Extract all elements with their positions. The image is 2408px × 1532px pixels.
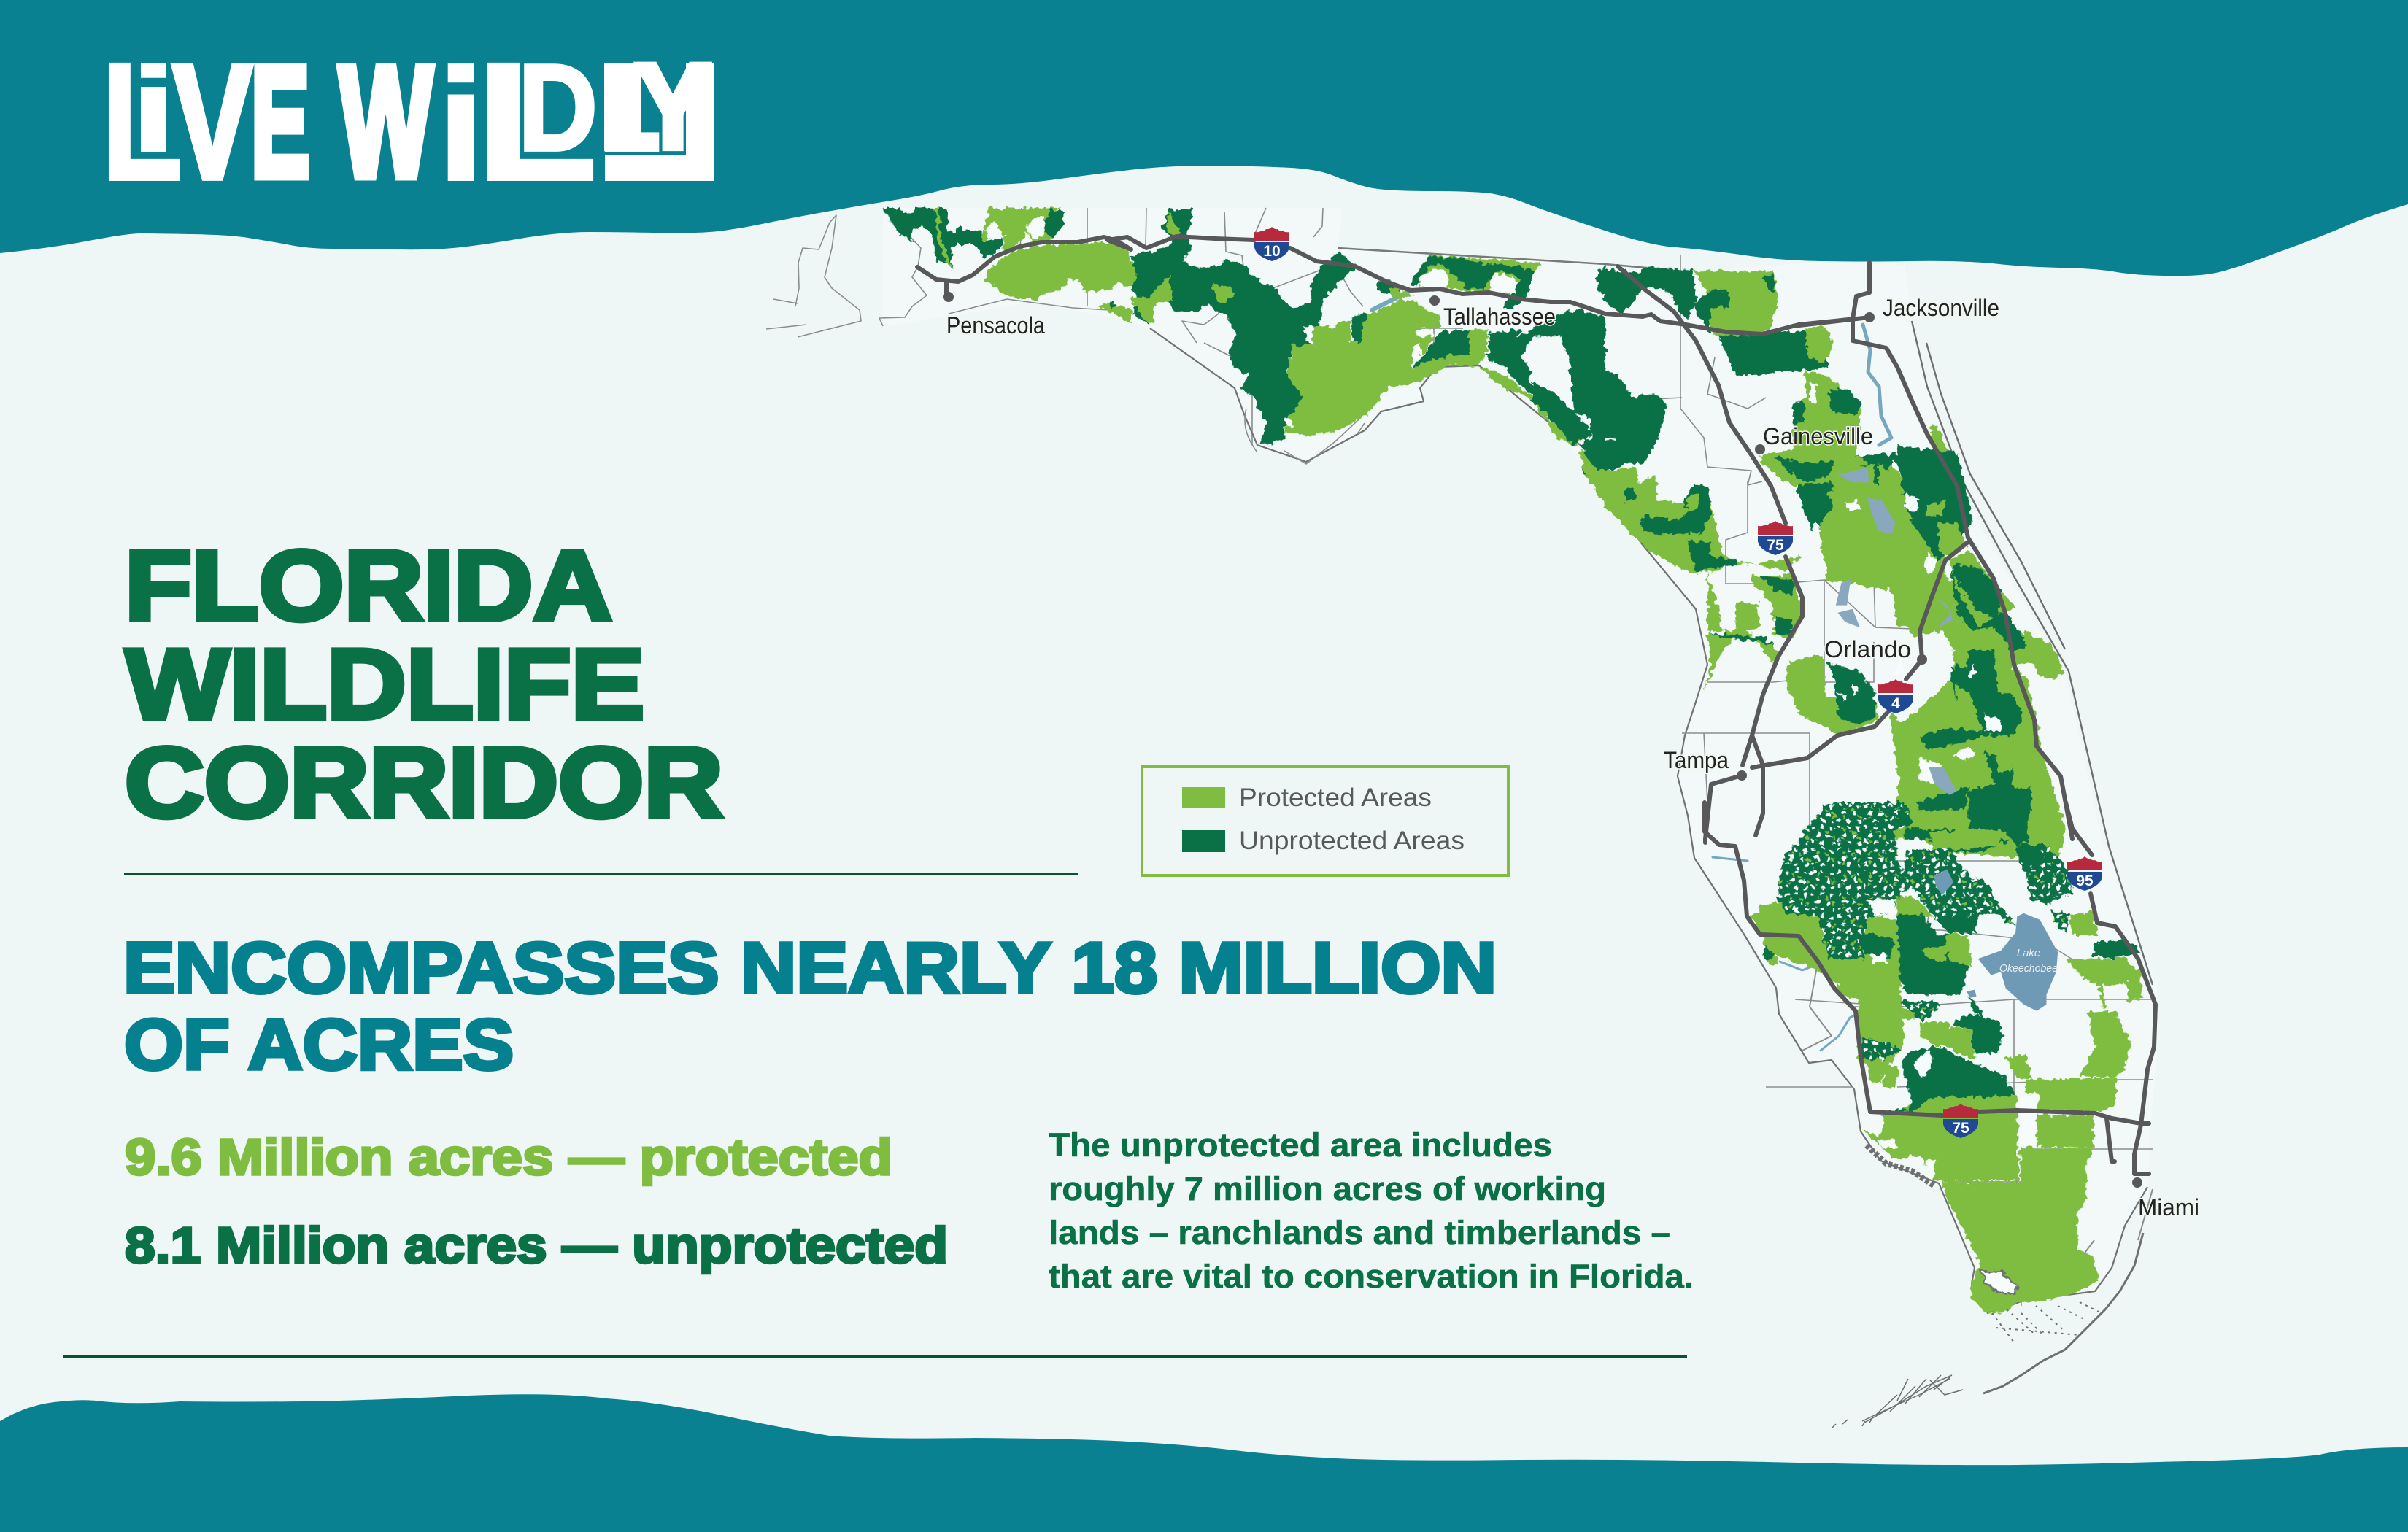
land gaps: [985, 214, 1046, 241]
city labels: Miami: [2138, 1194, 2199, 1220]
highway: I-95 south: [2066, 802, 2156, 1174]
logo: Live Wildly: [101, 28, 714, 215]
map of Florida: [766, 208, 2199, 1428]
logo: Live Wildly: i: [438, 37, 485, 213]
lake: small south: [1967, 990, 1976, 998]
shield: I-4: 4: [1891, 695, 1900, 712]
highway: I-4: [1752, 542, 1968, 767]
logo: Live Wildly: L: [601, 43, 659, 174]
shield: I-10: 10: [1263, 243, 1281, 260]
stat: protected acres: 9.6 Million acres — protected: [125, 1129, 892, 1185]
protected base coverage: [1582, 460, 2066, 1075]
protected: western panhandle: [981, 208, 1131, 322]
lakes: north and central: [1836, 468, 1957, 795]
unprotected: central panhandle: [1130, 209, 1605, 476]
protected base: central panhandle: [1095, 241, 1605, 492]
protected overlays: south Florida: [1919, 933, 1972, 965]
logo: Live Wildly: W: [339, 34, 433, 210]
paragraph: working lands: lands – ranchlands and timberlands –: [1049, 1214, 1670, 1251]
city labels: Tallahassee: [1443, 303, 1556, 330]
land gaps: [1870, 900, 2037, 1172]
shield: I-75 south: [1943, 1104, 1978, 1138]
top teal wave band: [0, 0, 2408, 276]
shield: I-75 south: 75: [1952, 1120, 1969, 1137]
paragraph: working lands: roughly 7 million acres of working: [1049, 1170, 1606, 1207]
logo: Live Wildly: i: [131, 43, 175, 177]
title: Florida Wildlife Corridor: FLORIDA: [125, 530, 612, 641]
water bodies: rivers: [1286, 292, 1891, 1051]
map region: central panhandle: [1095, 209, 1605, 492]
land mass: [883, 208, 2158, 1313]
subheading: total acreage: [123, 928, 1497, 1084]
bottom teal wave band: [0, 1394, 2408, 1532]
paragraph: working lands: The unprotected area includes: [1049, 1126, 1552, 1164]
southwest coast islands: [1867, 1145, 1934, 1185]
map region: south Florida: [1750, 802, 2142, 1313]
legend: unprotected label: Unprotected Areas: [1239, 827, 1465, 855]
protected base: north and central: [1581, 270, 2065, 839]
city labels: Orlando: [1824, 636, 1911, 662]
title: Florida Wildlife Corridor: [125, 530, 723, 837]
logo: Live Wildly: E: [251, 34, 309, 209]
base corridor coverage: [1582, 268, 2066, 1075]
highway: I-10: [917, 236, 1856, 334]
subheading: total acreage: OF ACRES: [124, 1004, 514, 1084]
stat: unprotected acres: 8.1 Million acres — unprotected: [125, 1217, 948, 1274]
Florida Keys: [1832, 1233, 2143, 1428]
interstate highways: [917, 236, 2156, 1174]
county lines and coastline: [766, 208, 2153, 1313]
land gaps: [1810, 384, 2002, 784]
highway: I-75 south: [1705, 802, 2149, 1123]
lake label: Lake Okeechobee: Lake: [2017, 947, 2040, 959]
city markers: [943, 292, 2142, 1188]
bottom divider: [63, 1355, 1687, 1358]
legend: protected label: Protected Areas: [1239, 784, 1432, 812]
divider under title: [124, 873, 1078, 875]
unprotected base coverage: [1597, 268, 2035, 852]
highway: Jacksonville connector: [1793, 317, 1869, 326]
title: Florida Wildlife Corridor: CORRIDOR: [125, 727, 723, 837]
legend: [1142, 767, 1508, 875]
city labels: Tampa: [1664, 747, 1729, 773]
unprotected: western panhandle: [882, 208, 1116, 309]
unprotected: south Florida: [1764, 802, 2141, 1112]
Ten Thousand Islands texture: [1981, 1272, 2017, 1294]
subheading: total acreage: ENCOMPASSES NEARLY 18 MILLION: [123, 928, 1497, 1008]
lake: Istokpoga: [1934, 870, 1953, 895]
city labels: Gainesville: [1763, 423, 1873, 449]
highway: Tampa spur: [1705, 775, 1742, 843]
highway: Pensacola spur: [944, 282, 949, 295]
city labels: Pensacola: [946, 312, 1045, 338]
corridor areas with roughened edges: [882, 208, 2142, 1313]
legend: unprotected swatch: [1182, 830, 1225, 852]
legend: protected swatch: [1182, 787, 1225, 808]
shield: I-75 north: [1758, 521, 1793, 555]
protected overlays: north and central: [1687, 494, 2013, 829]
title: Florida Wildlife Corridor: WILDLIFE: [126, 629, 644, 740]
fragmented unprotected parcels: [1778, 802, 2072, 1060]
protected base: south Florida: [1750, 812, 2142, 1313]
lake: Okeechobee: [1978, 913, 2058, 1011]
land gaps: [1284, 268, 1518, 428]
city labels: [946, 295, 2199, 1220]
paragraph: working lands: that are vital to conservation in Florida.: [1049, 1258, 1694, 1295]
logo: Live Wildly: D: [518, 39, 598, 176]
protected strip: [935, 208, 954, 270]
logo: Live Wildly: L: [101, 28, 182, 214]
paragraph: working lands: [1049, 1126, 1694, 1295]
protected overlays: central panhandle: [1130, 212, 1570, 437]
map region: western panhandle: [882, 208, 1131, 322]
shield: I-10: [1254, 227, 1289, 261]
map region: north and central Florida: [1532, 266, 2065, 839]
shield: I-95: [2067, 856, 2102, 891]
lakes: [1934, 870, 2058, 1011]
unprotected: north and central: [1532, 266, 2031, 839]
shield: I-4: [1878, 679, 1913, 713]
logo: Live Wildly: L: [475, 28, 598, 215]
shield: I-95: 95: [2076, 873, 2094, 889]
lake label: Lake Okeechobee: Okeechobee: [1999, 962, 2058, 975]
logo: Live Wildly: Y: [636, 39, 709, 174]
highway: I-75 north: [1618, 266, 1802, 835]
lake label: Lake Okeechobee: [1999, 947, 2058, 975]
shield: I-75 north: 75: [1767, 537, 1784, 554]
logo: Live Wildly: V: [173, 33, 252, 212]
highway: I-95 north: [1853, 263, 2072, 839]
city labels: Jacksonville: [1883, 295, 1999, 321]
